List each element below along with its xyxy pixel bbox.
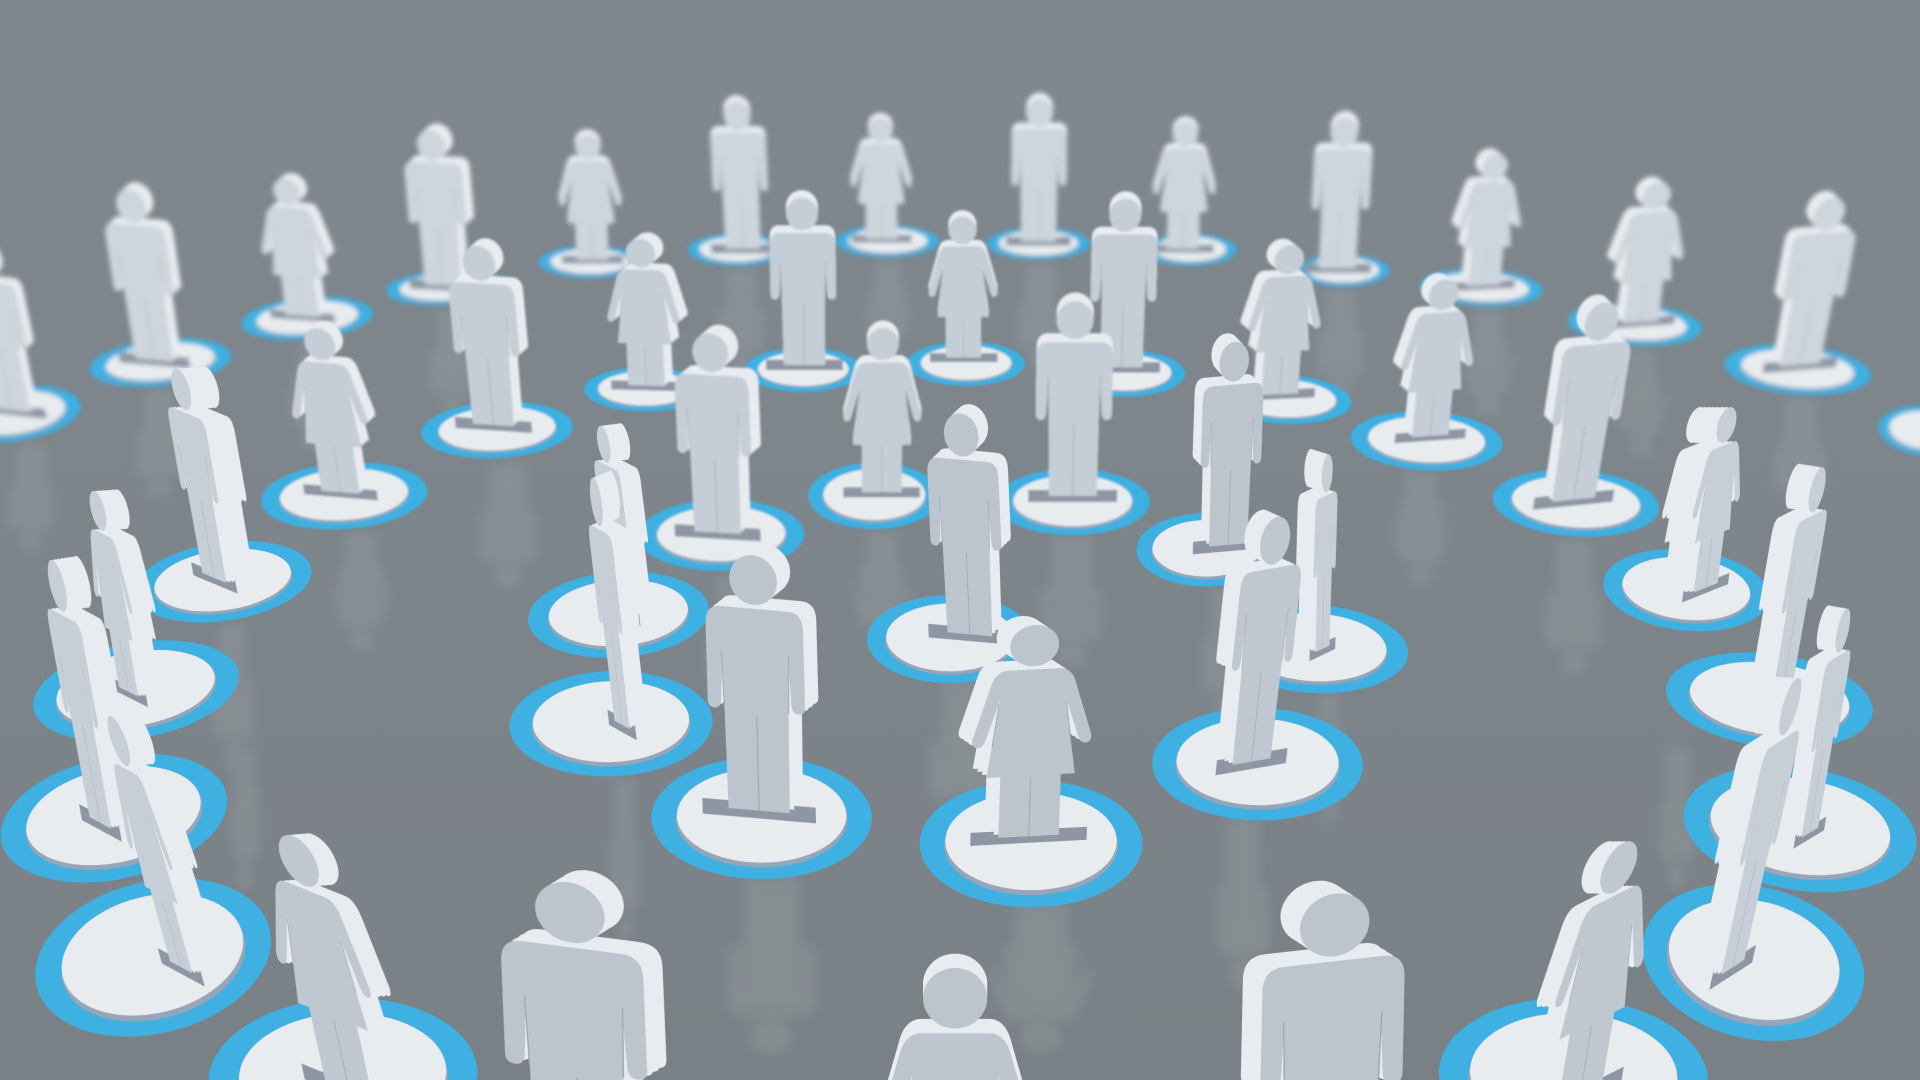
figure: man 25 (637, 322, 805, 572)
figure: man 37 (651, 538, 872, 879)
figure: woman 46 (877, 954, 1033, 1080)
figure: woman 44 (204, 807, 482, 1080)
figure: man 19 (1063, 191, 1185, 397)
figure: man 45 (485, 857, 673, 1080)
figure: man 36 (508, 452, 714, 780)
figure: woman 16 (584, 231, 707, 411)
figure: man 13 partial left (0, 237, 84, 450)
figure: man 15 (420, 235, 574, 462)
figure: man 31 (525, 405, 712, 664)
figure: woman 34 (25, 467, 247, 756)
figure: man 1 (87, 178, 233, 393)
figure: man 35 (1660, 442, 1878, 759)
figure: man 17 (744, 190, 862, 392)
figures: middle rows, slightly out of focus (259, 190, 1661, 572)
figure: woman 20 (1214, 237, 1353, 427)
figure: man 43 (1626, 644, 1881, 1063)
figure: man 39 (1151, 501, 1364, 822)
figure: woman 4 (539, 129, 642, 278)
figure: man 28 (1136, 330, 1276, 587)
figure: man 12 (1722, 187, 1873, 401)
figure: woman 24 (259, 317, 429, 535)
figure: woman 8 (1144, 116, 1237, 266)
figure: man 3 (385, 121, 509, 308)
figure: woman 11 (1566, 173, 1703, 350)
figure: man 27 (996, 292, 1150, 535)
figure: man 7 (987, 93, 1090, 260)
figure: man 41 (1674, 584, 1920, 908)
figures: front rows, in focus (0, 330, 1920, 1080)
figure: woman 29 (1599, 385, 1773, 639)
figure: woman 6 (836, 113, 939, 257)
figure: woman 21 (1349, 270, 1504, 474)
figure: woman 10 (1420, 146, 1544, 309)
figure: woman 38 (920, 612, 1142, 907)
floor reflections (7, 260, 1826, 1055)
figures: back row, out of focus (0, 93, 1920, 460)
figure: man 40 (0, 531, 239, 902)
figure: man 5 (688, 95, 786, 266)
figure: man 33 (1217, 434, 1410, 698)
figure: woman 2 (240, 170, 375, 345)
figure: woman 26 (808, 321, 940, 529)
figure: woman 48 (1435, 811, 1712, 1080)
figure: man 22 (1491, 290, 1661, 542)
figure: woman 42 (18, 687, 288, 1060)
figure: woman 18 (907, 210, 1025, 386)
figure: man 9 (1297, 111, 1390, 287)
figure: man 30 (129, 345, 317, 633)
disc: far right partial (1876, 402, 1920, 460)
figure: man 47 (1237, 870, 1418, 1080)
figure: man 32 (867, 400, 1033, 683)
